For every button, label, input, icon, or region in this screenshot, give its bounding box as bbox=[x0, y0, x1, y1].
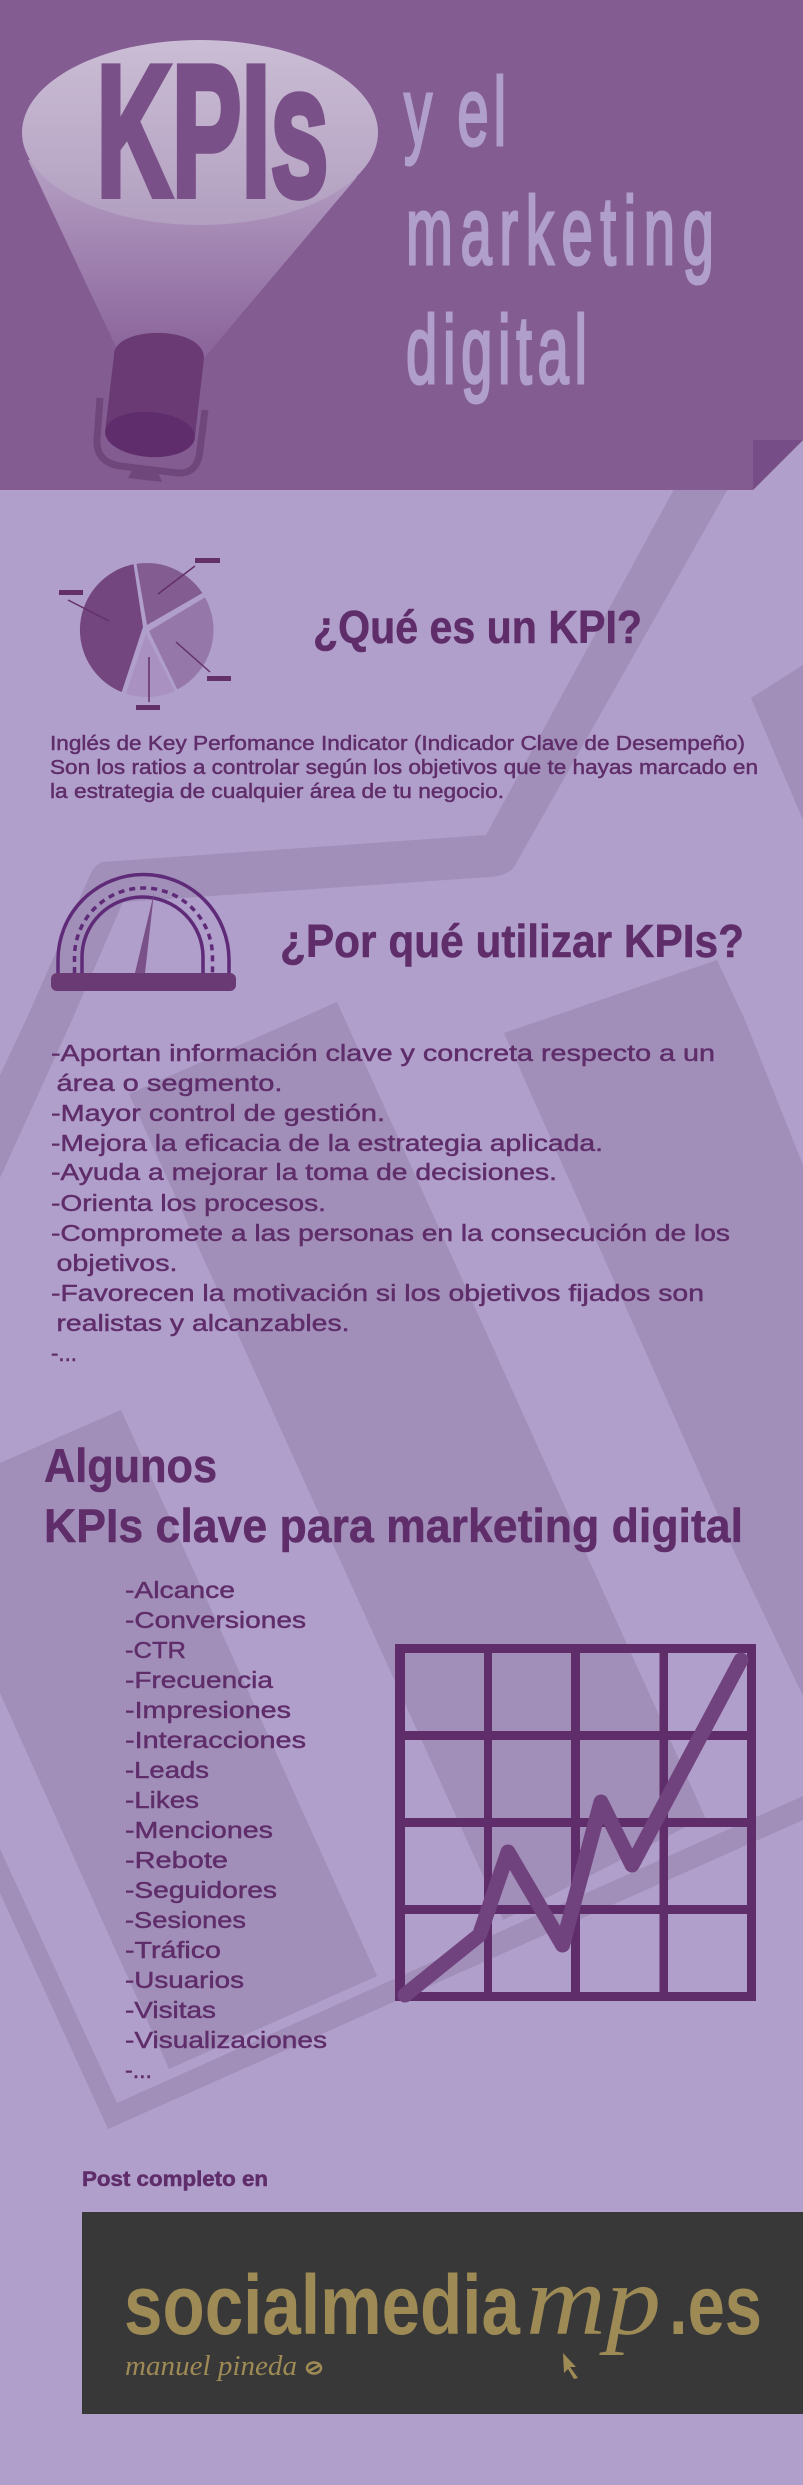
list: KPI names: -Likes bbox=[125, 1787, 199, 1813]
header panel bbox=[0, 0, 803, 490]
title: KPIs: KPIs bbox=[96, 26, 328, 236]
list: reasons: -Favorecen la motivación si los objetivos fijados son bbox=[51, 1280, 704, 1306]
heading: some key KPIs bbox=[44, 1439, 743, 1552]
list: KPI names: -Alcance bbox=[125, 1577, 235, 1603]
icon: gauge bbox=[51, 874, 236, 991]
icon: cursor bbox=[563, 2353, 578, 2379]
list: KPI names: -Seguidores bbox=[125, 1877, 277, 1903]
heading: why use KPIs: ¿Por qué utilizar KPIs? bbox=[280, 915, 744, 967]
definition text bbox=[50, 733, 758, 803]
lamp base bbox=[128, 467, 162, 482]
logo wordmark bbox=[124, 2245, 762, 2356]
list: KPI names: -... bbox=[125, 2057, 152, 2083]
list: reasons: -Aportan información clave y concreta respecto a un bbox=[51, 1040, 715, 1066]
title: y el marketing digital: marketing bbox=[406, 176, 714, 285]
list: reasons: -Mayor control de gestión. bbox=[51, 1100, 385, 1126]
list: reasons: -Ayuda a mejorar la toma de decisiones. bbox=[51, 1159, 557, 1185]
icon: pie chart bbox=[59, 558, 231, 710]
lamp body bbox=[105, 333, 204, 436]
light beam bbox=[28, 160, 357, 357]
logo wordmark: socialmedia bbox=[124, 2258, 521, 2352]
list: reasons: -Orienta los procesos. bbox=[51, 1190, 326, 1216]
lamp lens bbox=[104, 409, 196, 460]
corner fold bbox=[753, 440, 803, 490]
list: KPI names: -Usuarios bbox=[125, 1967, 244, 1993]
list: KPI names: -Rebote bbox=[125, 1847, 228, 1873]
list: KPI names: -Leads bbox=[125, 1757, 209, 1783]
post link label: Post completo en bbox=[82, 2168, 268, 2191]
icon: author mark bbox=[307, 2362, 321, 2374]
lamp bracket bbox=[97, 398, 205, 473]
list: KPI names: -Impresiones bbox=[125, 1697, 291, 1723]
list: reasons: área o segmento. bbox=[56, 1070, 282, 1096]
definition text: Son los ratios a controlar según los objetivos que te hayas marcado en bbox=[50, 757, 758, 779]
title: y el marketing digital bbox=[404, 57, 714, 404]
list: reasons: realistas y alcanzables. bbox=[56, 1310, 350, 1336]
logo wordmark: mp bbox=[526, 2245, 661, 2356]
heading: what is a KPI: ¿Qué es un KPI? bbox=[313, 601, 642, 653]
list: reasons: -Mejora la eficacia de la estrategia aplicada. bbox=[51, 1130, 603, 1156]
list: reasons: objetivos. bbox=[56, 1250, 178, 1276]
list: KPI names: -Tráfico bbox=[125, 1937, 221, 1963]
list: KPI names: -Sesiones bbox=[125, 1907, 246, 1933]
title: y el marketing digital: digital bbox=[406, 295, 587, 404]
definition text: la estrategia de cualquier área de tu negocio. bbox=[50, 781, 504, 803]
list: reasons: -... bbox=[51, 1340, 77, 1366]
list: KPI names: -CTR bbox=[125, 1637, 186, 1663]
title: y el marketing digital: y el bbox=[404, 57, 506, 166]
list: KPI names: -Menciones bbox=[125, 1817, 273, 1843]
logo author: manuel pineda bbox=[125, 2351, 297, 2382]
logo wordmark: .es bbox=[669, 2258, 762, 2352]
heading: some key KPIs: KPIs clave para marketing digital bbox=[44, 1499, 743, 1552]
list: KPI names: -Visualizaciones bbox=[125, 2027, 327, 2053]
light ellipse bbox=[22, 40, 378, 225]
list: KPI names: -Conversiones bbox=[125, 1607, 306, 1633]
list: KPI names bbox=[125, 1577, 327, 2083]
list: KPI names: -Frecuencia bbox=[125, 1667, 273, 1693]
list: reasons: -Compromete a las personas en la consecución de los bbox=[51, 1220, 730, 1246]
spotlight illustration bbox=[22, 40, 378, 482]
definition text: Inglés de Key Perfomance Indicator (Indicador Clave de Desempeño) bbox=[50, 733, 745, 755]
heading: some key KPIs: Algunos bbox=[44, 1439, 217, 1492]
list: KPI names: -Interacciones bbox=[125, 1727, 306, 1753]
list: reasons bbox=[51, 1040, 730, 1366]
list: KPI names: -Visitas bbox=[125, 1997, 216, 2023]
logo banner bbox=[82, 2212, 803, 2414]
line chart icon bbox=[395, 1644, 756, 2001]
trend line bbox=[405, 1660, 741, 1995]
background watermark: chart bars and trend line bbox=[0, 480, 803, 2129]
